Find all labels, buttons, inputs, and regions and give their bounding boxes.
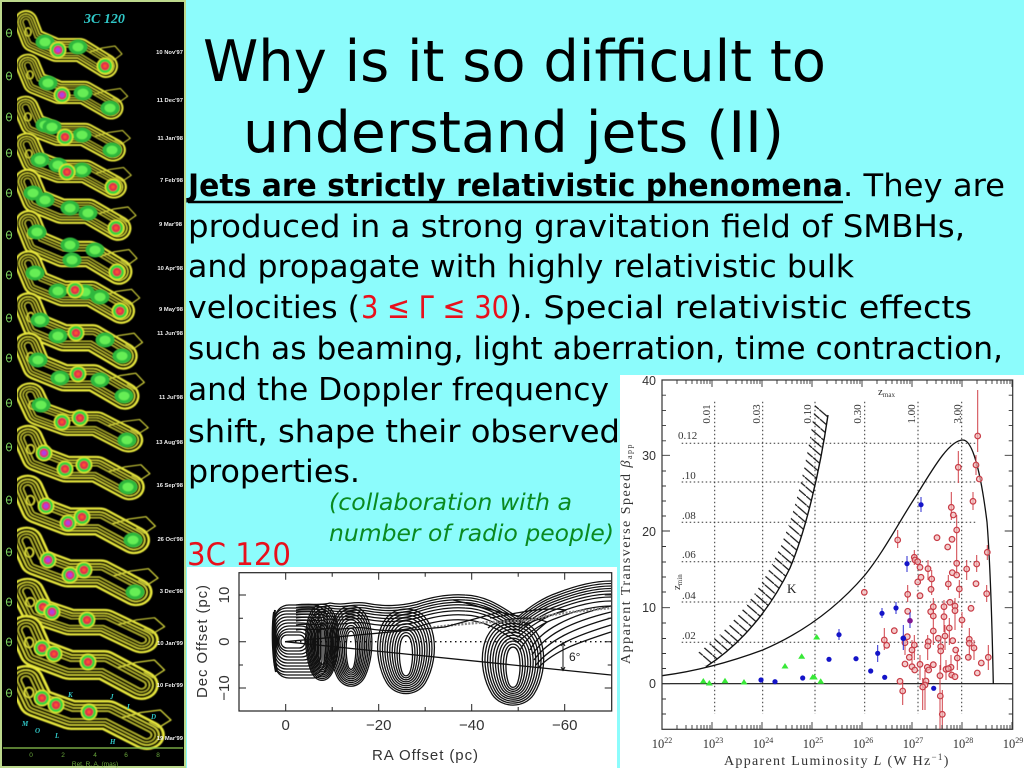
zero line xyxy=(662,683,1013,685)
jet contour rows xyxy=(25,22,171,735)
axis numbers: −60 xyxy=(552,717,577,734)
body text: ). Special relativistic effects xyxy=(509,290,972,326)
body text: Jets are strictly relativistic phenomena xyxy=(186,168,843,204)
x axis numbers: 10 xyxy=(803,737,815,751)
K limit hatched band: K xyxy=(787,581,797,596)
body text: 3 ≤ Γ ≤ 30 xyxy=(361,290,509,326)
axis titles: Dec Offset (pc) xyxy=(194,585,211,698)
knot labels: J xyxy=(109,693,114,701)
observation dates: 10 Feb'99 xyxy=(157,683,184,689)
body text: velocities ( xyxy=(188,290,360,326)
image axis: 8 xyxy=(156,752,160,759)
title xyxy=(203,29,826,166)
observation dates: 19 Mar'99 xyxy=(157,736,184,742)
y axis title: app xyxy=(625,443,634,459)
x axis numbers: 10 xyxy=(753,737,765,751)
image axis: 2 xyxy=(61,752,65,759)
knot labels: O xyxy=(35,727,40,735)
z labels: 3.00 xyxy=(952,404,964,424)
x axis numbers: 10 xyxy=(903,737,915,751)
z labels: 0.10 xyxy=(802,404,814,424)
chart: simulated jet contours xyxy=(187,567,617,768)
observation dates: 9 Mar'98 xyxy=(159,222,183,228)
title: Why is it so difficult to xyxy=(203,29,826,95)
angle marker 6 degrees xyxy=(561,642,581,670)
x axis numbers: 10 xyxy=(652,737,664,751)
x axis numbers: 24 xyxy=(765,736,773,745)
body text: such as beaming, light aberration, time contraction, xyxy=(188,331,1003,367)
z labels: z xyxy=(878,386,883,398)
z labels xyxy=(671,386,964,642)
angle marker 6 degrees: 6° xyxy=(569,650,581,664)
jet knots xyxy=(24,34,144,720)
axis numbers xyxy=(216,587,577,734)
x axis numbers: 25 xyxy=(815,736,823,745)
z labels: .10 xyxy=(682,470,696,482)
x axis numbers: 22 xyxy=(664,736,672,745)
knot labels: M xyxy=(21,720,29,728)
y axis numbers: 0 xyxy=(649,677,656,691)
collaboration note xyxy=(329,490,614,547)
observation dates: 7 Feb'98 xyxy=(160,178,184,184)
body text: and the Doppler frequency xyxy=(188,372,609,408)
z labels: .02 xyxy=(682,630,696,642)
body text: . They are xyxy=(843,168,1005,204)
z labels: 0.03 xyxy=(751,404,763,424)
contour lines xyxy=(273,581,611,705)
axis titles xyxy=(194,585,478,764)
grid of z lines xyxy=(682,402,976,714)
x axis numbers: 23 xyxy=(715,736,723,745)
y axis numbers: 40 xyxy=(642,374,656,388)
jet cone lines xyxy=(285,612,611,675)
chart: apparent speed vs luminosity xyxy=(619,374,1024,768)
knot labels: H xyxy=(109,738,116,746)
knot labels: L xyxy=(54,732,59,740)
x axis numbers: 10 xyxy=(853,737,865,751)
z labels: .04 xyxy=(682,590,696,602)
z labels: 1.00 xyxy=(906,404,918,424)
observation dates: 9 May'98 xyxy=(159,307,184,313)
radio galaxies: green triangles xyxy=(700,634,824,686)
panel: 3C 120 VLBI image sequence xyxy=(0,0,186,768)
observation dates: 10 Apr'98 xyxy=(157,266,184,272)
source label: 3C 120: 3C 120 xyxy=(187,537,291,573)
image title: 3C 120 xyxy=(83,12,125,27)
observation dates: 11 Jul'98 xyxy=(159,395,184,401)
image axis: Ret. R. A. (mas) xyxy=(72,761,118,768)
ridge line xyxy=(430,608,611,628)
z labels: .08 xyxy=(682,510,696,522)
collaboration note: number of radio people) xyxy=(329,521,614,547)
knot labels: D xyxy=(150,713,156,721)
body text: produced in a strong gravitation field of SMBHs, xyxy=(188,209,965,245)
quasars: red open circles xyxy=(862,433,991,717)
observation dates: 11 Jan'98 xyxy=(157,136,184,142)
x axis numbers: 26 xyxy=(865,736,873,745)
axis titles: RA Offset (pc) xyxy=(372,747,478,764)
axis numbers: 0 xyxy=(216,638,233,646)
y axis numbers: 30 xyxy=(642,449,656,463)
image axis: 6 xyxy=(124,752,128,759)
y axis numbers: 20 xyxy=(642,525,656,539)
z labels: z xyxy=(671,585,683,590)
image axis xyxy=(3,748,183,768)
knot labels: K xyxy=(67,691,74,699)
axis numbers: 0 xyxy=(282,717,290,734)
axis numbers: 10 xyxy=(216,587,233,603)
x axis numbers: 10 xyxy=(703,737,715,751)
knot labels xyxy=(21,691,156,746)
z labels: min xyxy=(676,574,684,585)
observation dates: 3 Dec'98 xyxy=(160,589,184,595)
x axis numbers: 28 xyxy=(965,736,973,745)
knot labels: I xyxy=(126,703,130,711)
BL Lacs: blue filled circles xyxy=(758,497,936,691)
y axis numbers xyxy=(642,374,656,691)
observation dates: 26 Oct'98 xyxy=(157,537,184,543)
envelope curve xyxy=(662,440,993,684)
error bars xyxy=(884,390,988,729)
axes frame xyxy=(662,380,1013,729)
observation dates: 11 Dec'97 xyxy=(157,98,183,104)
observation dates: 11 Jun'98 xyxy=(157,331,184,337)
title: understand jets (II) xyxy=(243,100,784,166)
beam symbols xyxy=(6,29,12,697)
K limit hatched band xyxy=(695,405,828,667)
z labels: 0.12 xyxy=(678,430,697,442)
observation dates: 10 Nov'97 xyxy=(156,50,183,56)
collaboration note: (collaboration with a xyxy=(329,490,572,516)
x axis title: −1 xyxy=(932,752,944,762)
body text: shift, shape their observed xyxy=(188,414,620,450)
y axis title: Apparent Transverse Speed β xyxy=(619,459,634,664)
body text: and propagate with highly relativistic bulk xyxy=(188,249,854,285)
image axis: 4 xyxy=(93,752,97,759)
axis numbers: −20 xyxy=(366,717,391,734)
z labels: 0.01 xyxy=(701,404,713,424)
body text xyxy=(186,168,1005,490)
x axis numbers: 27 xyxy=(915,736,923,745)
observation dates: 16 Sep'98 xyxy=(156,483,184,489)
y axis numbers: 10 xyxy=(642,601,656,615)
image axis: 0 xyxy=(29,752,33,759)
axes frame xyxy=(239,573,612,711)
axis numbers: −10 xyxy=(216,675,233,701)
observation dates: 10 Jan'99 xyxy=(157,641,184,647)
x axis numbers: 29 xyxy=(1015,736,1023,745)
x axis numbers: 10 xyxy=(1003,737,1015,751)
z labels: 0.30 xyxy=(852,404,864,424)
axis numbers: −40 xyxy=(459,717,484,734)
observation dates xyxy=(156,50,184,742)
body text: properties. xyxy=(188,454,360,490)
x axis numbers xyxy=(652,736,1023,751)
observation dates: 13 Aug'98 xyxy=(156,440,184,446)
z labels: .06 xyxy=(682,549,696,561)
z labels: max xyxy=(883,391,895,399)
x axis numbers: 10 xyxy=(953,737,965,751)
